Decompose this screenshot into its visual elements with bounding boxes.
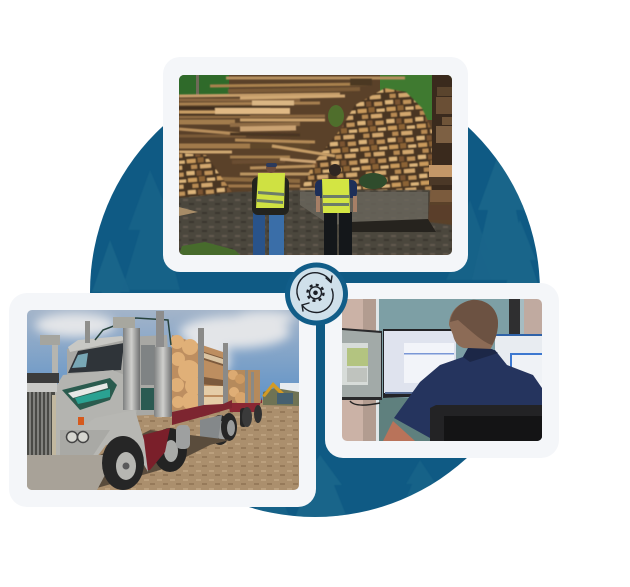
office chair [430,405,542,441]
icon: gear with circular arrows [297,273,333,312]
trailer wheels [216,415,227,445]
second axle wheel [153,428,187,472]
cut log stack at left [179,153,232,203]
green sapling in pile [328,105,344,127]
front wheel [102,436,144,490]
red trailer chassis [172,400,232,425]
fender and lower body [90,414,148,472]
worker right [315,164,357,255]
photo: dispatcher at computer monitors [342,299,542,441]
grille [27,392,55,455]
main log load [172,335,223,410]
green cab stripe [62,378,117,410]
bumper [27,455,107,490]
cab [67,335,172,416]
connector: process cycle badge [285,262,348,326]
excavator and background [280,383,299,392]
photo: workers in high-visibility vests beside a log pile [179,75,452,255]
right column of logs [432,75,452,195]
infographic: three connected photo cards over a forest circle [9,57,559,517]
photo: logging truck loaded with logs [27,310,299,490]
right monitor [495,336,542,366]
window frame [95,318,171,345]
far trailer [228,370,260,403]
muddy ground [179,190,452,255]
red chassis behind front wheel [143,428,170,470]
dark shadow beneath truck [90,430,230,490]
worker left [252,163,289,255]
panel: logging truck photo card [9,293,316,507]
logs, side view [179,78,405,190]
log ends right of pile [300,88,440,194]
man [383,421,415,441]
panel: log pile inspection photo card [163,57,468,272]
left monitor [342,328,382,400]
mirrors and stacks [40,335,60,345]
centre monitor [383,329,455,398]
bonnet [55,370,140,458]
panel: office worker photo card [325,283,559,458]
headlights and indicator [66,432,78,442]
forest circle background [90,126,540,517]
